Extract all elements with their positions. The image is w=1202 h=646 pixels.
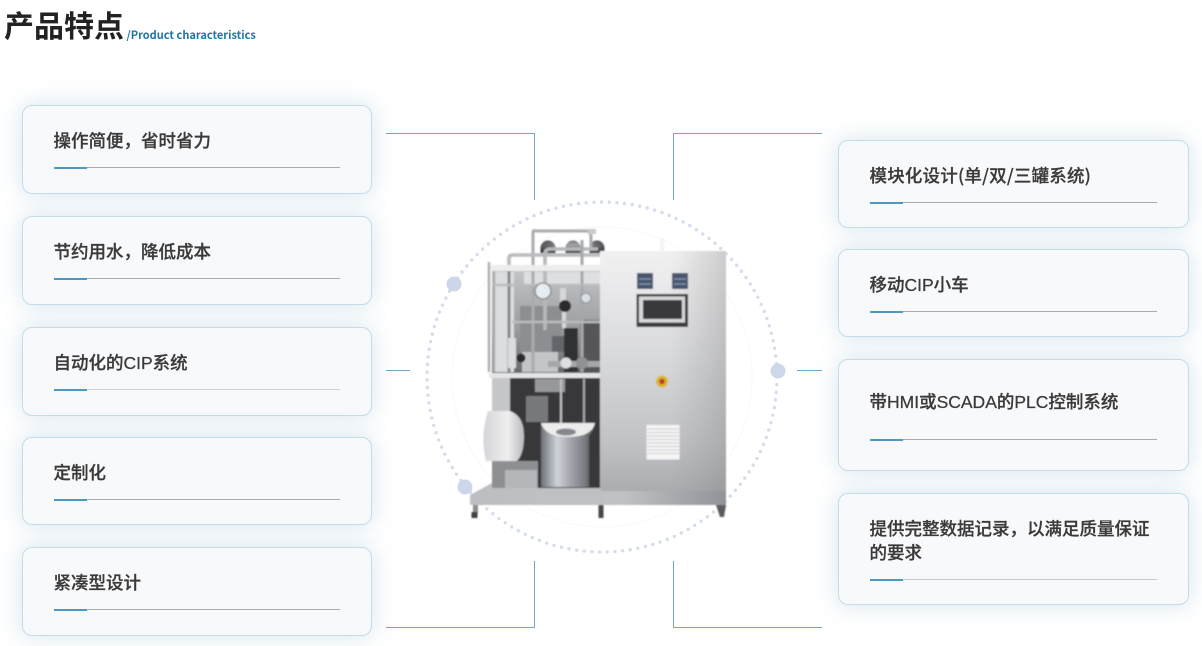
connector: right top [673,133,822,200]
gauge panel: left [637,273,653,289]
accent line [870,202,903,204]
connector: right bottom [673,561,822,628]
accent line [54,167,87,169]
middle shelf [489,373,600,378]
divider line [870,579,1157,580]
pipes [533,231,591,372]
divider line [54,278,340,279]
divider line [870,311,1157,312]
panel: 节约用水降低成本 [22,216,372,305]
text: 移动CIP小车 [870,275,969,295]
pump block [492,461,538,488]
subheading: Product characteristics: /Product characteristics [126,26,256,42]
connector: left bottom [386,561,535,628]
machine: control cabinet [600,238,726,505]
text: 自动化的CIP系统 [54,353,188,373]
connector: left top [386,133,535,200]
ring node: upper left [446,276,462,292]
machine: base and feet [470,483,726,518]
divider line [54,609,340,610]
panel: 模块化设计 [838,140,1189,228]
connector: left middle [386,370,410,371]
cylindrical tank [541,423,595,487]
valve domes [540,241,604,253]
curved cover [483,411,524,461]
upper frame backdrop [492,268,600,374]
heading: 产品特点: 产品特点 [4,11,124,44]
text: 节约用水，降低成本 [54,242,211,262]
black valves [559,300,571,312]
text: 提供完整数据记录，以满足质量保证 [870,519,1150,539]
gauge panel: right [672,273,688,289]
divider line [54,389,340,390]
accent line [54,609,87,611]
pressure gauges [535,283,551,299]
faint inner ring [452,227,752,527]
accent line [870,579,903,581]
lower bay [492,378,510,412]
divider line [54,167,340,168]
divider line [54,499,340,500]
touch screen [636,294,688,327]
vent grille [646,425,680,460]
machine: CIP unit [470,229,726,518]
divider line [870,202,1157,203]
panel: 定制化 [22,437,372,525]
text: 定制化 [54,463,106,483]
text: 的要求 [870,543,922,563]
accent line [54,499,87,501]
panel: 带HMI或SCADA的PLC控制系统 [838,359,1189,471]
emergency stop button [656,376,668,388]
panel: 提供完整数据记录 [838,493,1189,605]
text: 模块化设计(单/双/三罐系统) [870,163,1091,188]
machine: pipework section [483,229,604,488]
panel: 操作简便省时省力 [22,105,372,194]
accent line [870,439,903,441]
accent line [54,389,87,391]
text: 紧凑型设计 [54,573,141,593]
dotted ring [427,202,777,552]
divider line [870,439,1157,440]
accent line [54,278,87,280]
connector: right middle [797,370,822,371]
text: 带HMI或SCADA的PLC控制系统 [870,392,1118,412]
panel: 紧凑型设计 [22,547,372,636]
ring node: right [770,364,786,378]
panel: 移动CIP小车 [838,249,1189,337]
accent line [870,311,903,313]
text: 操作简便，省时省力 [54,131,211,151]
text [870,519,1150,563]
panel: 自动化的CIP系统 [22,327,372,416]
title [4,11,256,44]
ring node: lower left [458,480,472,494]
